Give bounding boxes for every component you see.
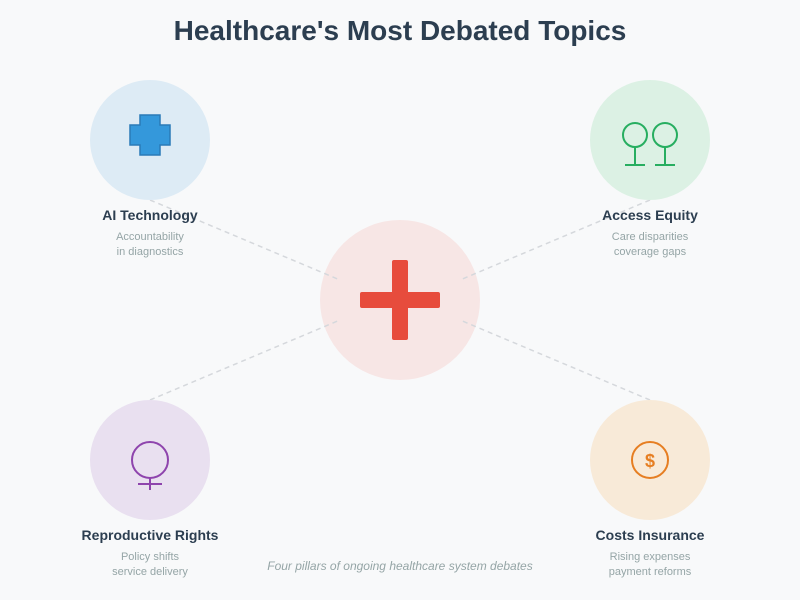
panel: Access Equity: Access Equity <box>602 207 698 223</box>
icon: people <box>623 123 677 165</box>
icon: dollar coin: $ <box>645 451 655 471</box>
panel: Reproductive Rights: Policy shifts <box>121 551 180 563</box>
panel: AI Technology <box>90 80 210 258</box>
panel: Costs Insurance: Rising expenses <box>610 551 691 563</box>
panel: Access Equity <box>590 80 710 258</box>
icon: center cross <box>360 260 440 340</box>
footer caption: Four pillars of ongoing healthcare system debates <box>267 559 533 573</box>
panel: Costs Insurance: payment reforms <box>609 566 692 578</box>
panel: AI Technology: AI Technology <box>102 207 198 223</box>
icon: female symbol <box>132 442 168 490</box>
panel: AI Technology: Accountability <box>116 231 184 243</box>
panel: Costs Insurance <box>590 400 710 578</box>
panel: AI Technology: in diagnostics <box>117 246 184 258</box>
center hub <box>320 220 480 380</box>
icon: medical cross <box>130 115 170 155</box>
panel: Reproductive Rights: Reproductive Rights <box>82 527 219 543</box>
panel: Costs Insurance: Costs Insurance <box>596 527 705 543</box>
panel: Reproductive Rights: service delivery <box>112 566 188 578</box>
icon: dollar coin <box>632 442 668 478</box>
panel: Access Equity: Care disparities <box>612 231 689 243</box>
panel: Access Equity: coverage gaps <box>614 246 687 258</box>
title: Healthcare's Most Debated Topics <box>174 15 626 46</box>
panel: Reproductive Rights <box>82 400 219 578</box>
